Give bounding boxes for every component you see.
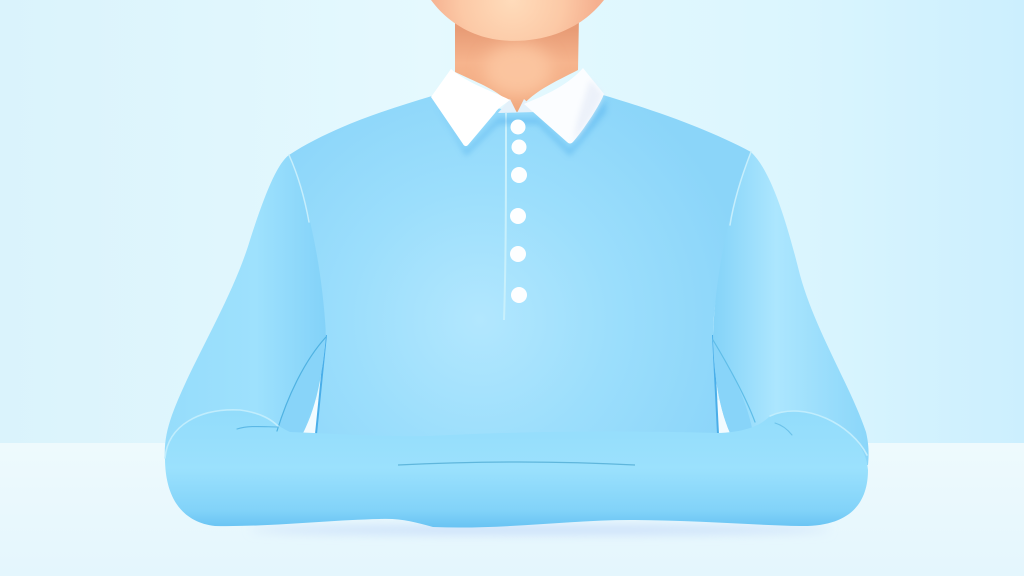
collar left flap <box>431 69 510 146</box>
torso of shirt <box>289 95 751 440</box>
chin <box>431 0 604 41</box>
collar shadow on shirt <box>450 102 608 156</box>
collar right flap shading <box>573 80 603 142</box>
forearm centre seam <box>398 462 635 465</box>
gap background between arms and torso <box>295 400 735 436</box>
table surface <box>0 443 1024 576</box>
collar right flap <box>524 68 604 144</box>
torso side shading <box>316 335 718 434</box>
neck <box>455 22 579 112</box>
table shadow under arms <box>250 526 830 534</box>
placket line <box>504 113 506 320</box>
background wall <box>0 0 1024 444</box>
right sleeve <box>713 152 869 465</box>
left sleeve <box>164 156 326 455</box>
sleeve creases <box>165 152 867 458</box>
folded forearms <box>165 411 868 528</box>
collar inner band <box>498 99 538 113</box>
shirt buttons <box>510 120 527 303</box>
collar <box>431 68 606 156</box>
